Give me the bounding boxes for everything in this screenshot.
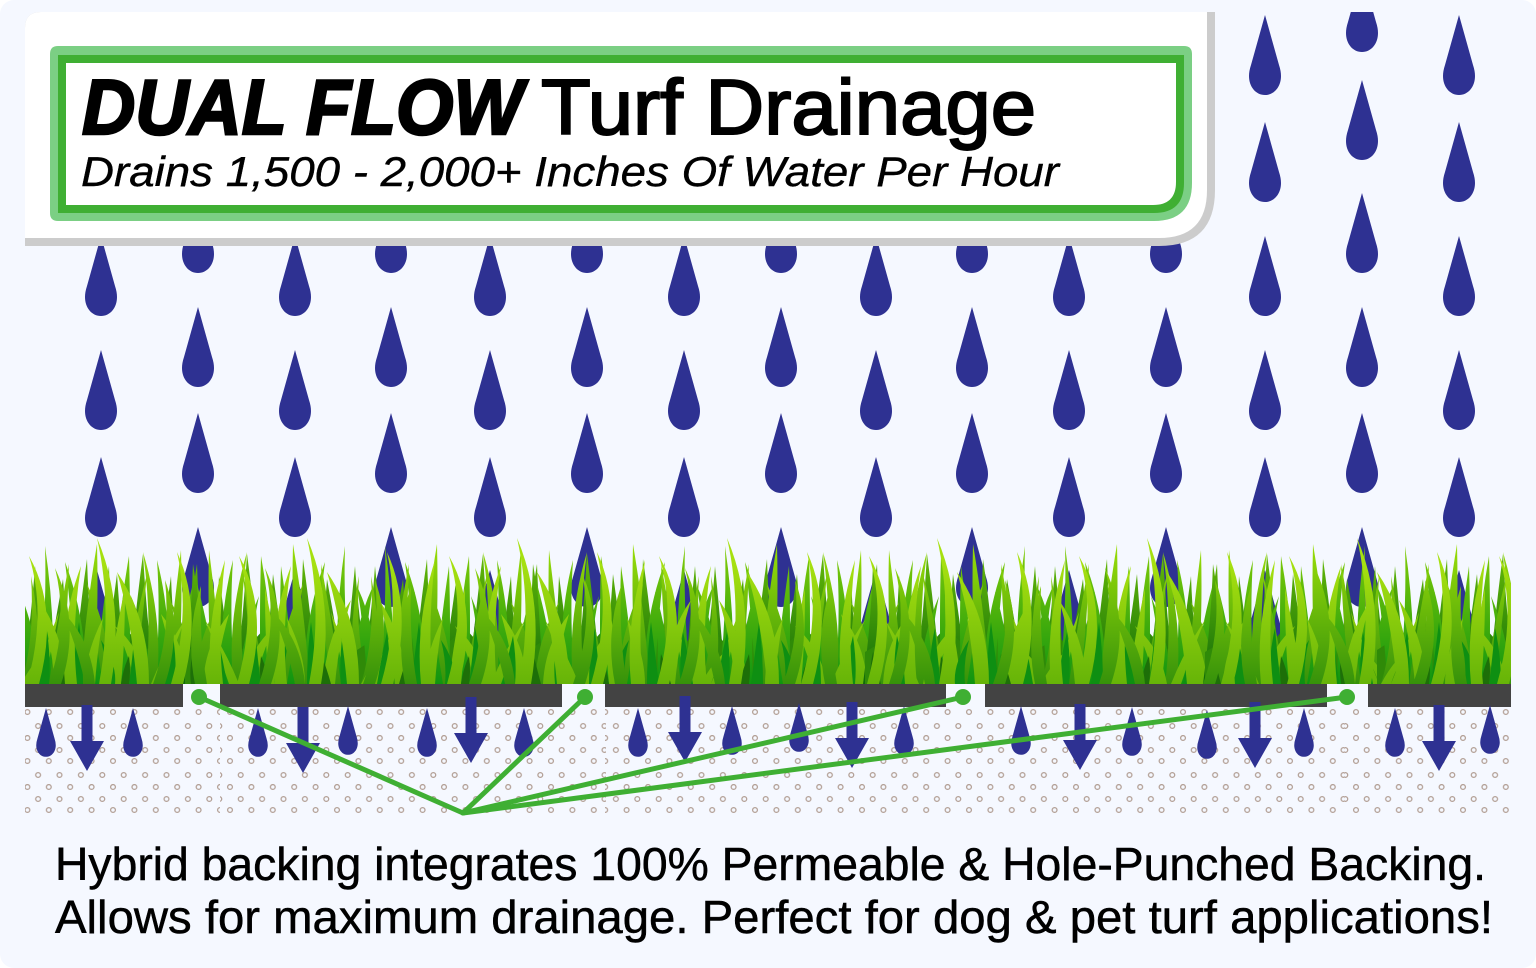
small drain drops [36, 703, 1500, 759]
callout lines to drain holes [191, 689, 1355, 813]
title: turf drainage: Turf Drainage [541, 63, 1036, 151]
drain arrows [70, 696, 1456, 773]
soil texture [25, 707, 1511, 815]
backing strip with drain holes [25, 684, 1511, 707]
caption line 1: Hybrid backing integrates 100% Permeable & Hole-Punched Backing. [55, 838, 1486, 890]
caption [55, 838, 1493, 943]
subtitle: Drains 1,500 - 2,000+ Inches Of Water Per Hour [81, 148, 1061, 195]
grass [17, 538, 1536, 684]
title frame [50, 46, 1192, 221]
rain drops [81, 0, 1475, 650]
title: dual flow: DUAL FLOW [82, 63, 529, 151]
title card [25, 12, 1215, 246]
caption line 2: Allows for maximum drainage. Perfect for dog & pet turf applications! [55, 891, 1493, 943]
